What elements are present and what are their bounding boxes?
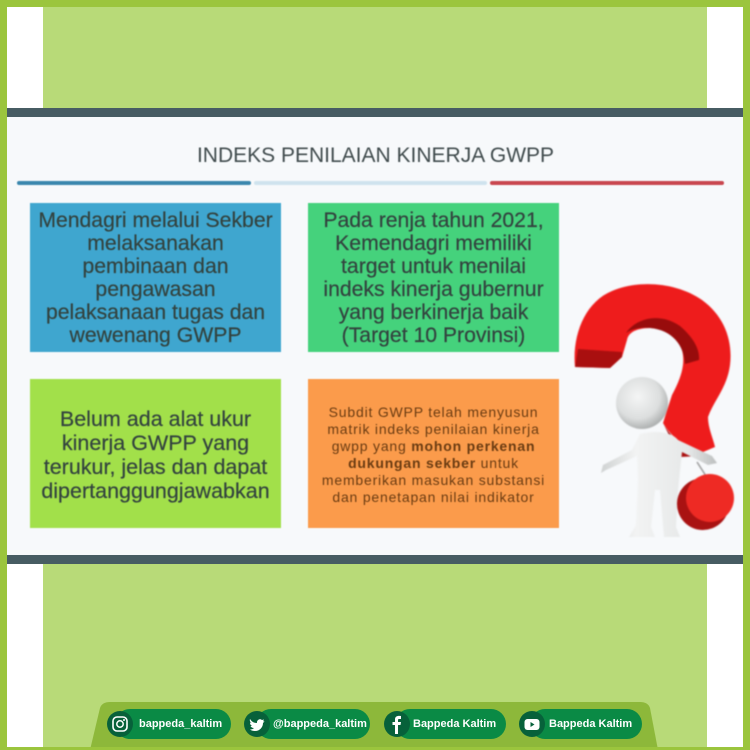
icon: instagram (107, 711, 133, 737)
panel: blue text box: melaksanakan (87, 232, 224, 255)
slide top bar (7, 108, 743, 117)
panel: orange text box: memberikan masukan substansi (322, 472, 545, 488)
panel: orange text box: gwpp yang mohon perkenan (332, 438, 535, 454)
panel: lime text box: terukur, jelas dan dapat (44, 455, 267, 479)
social pill: youtube (530, 709, 642, 739)
panel: lime text box (30, 379, 281, 528)
social pill: facebook: Bappeda Kaltim (413, 718, 496, 730)
outer frame top (0, 0, 750, 7)
panel: blue text box (30, 203, 281, 352)
panel: green text box: Pada renja tahun 2021, (323, 209, 544, 232)
panel: blue text box: Mendagri melalui Sekber (38, 209, 273, 232)
panel: orange text box: dukungan sekber untuk (348, 454, 519, 470)
panel: lime text box: kinerja GWPP yang (62, 431, 249, 455)
panel: lime text box: Belum ada alat ukur (60, 407, 251, 431)
panel: green text box: (Target 10 Provinsi) (342, 324, 525, 347)
social pill: instagram (115, 709, 231, 739)
panel: blue text box: pelaksanaan tugas dan (46, 301, 265, 324)
icon: youtube (519, 711, 545, 737)
icon: red question mark (575, 284, 731, 457)
panel: orange text box (308, 379, 559, 528)
panel: orange text box: Subdit GWPP telah menyusun (329, 404, 538, 420)
panel: green text box: yang berkinerja baik (339, 301, 528, 324)
icon: facebook (384, 711, 410, 737)
panel: lime text box: dipertanggungjawabkan (41, 479, 270, 503)
green background upper (43, 7, 707, 109)
outer frame right (743, 0, 750, 750)
panel: blue text box: pembinaan dan (82, 255, 229, 278)
panel: orange text box: matrik indeks penilaian kinerja (327, 420, 540, 436)
panel: green text box: indeks kinerja gubernur (323, 278, 544, 301)
panel: blue text box: pengawasan (95, 278, 216, 301)
social pill: twitter: @bappeda_kaltim (273, 718, 367, 730)
green background lower (43, 563, 707, 750)
blue title rule (17, 181, 251, 185)
social pill: instagram: bappeda_kaltim (139, 718, 222, 730)
slide bottom bar (7, 555, 743, 564)
title: INDEKS PENILAIAN KINERJA GWPP (197, 144, 554, 167)
icon: red cylinder weight (670, 462, 736, 537)
social pill: youtube: Bappeda Kaltim (549, 718, 632, 730)
social pill: facebook (395, 709, 506, 739)
panel: orange text box: dan penetapan nilai indikator (332, 488, 535, 504)
icon: twitter (244, 711, 270, 737)
panel: green text box (308, 203, 559, 352)
central slide panel (7, 108, 743, 564)
outer frame bottom (0, 747, 750, 750)
icon: white figure (601, 377, 717, 537)
red title rule (490, 181, 724, 185)
outer frame left (0, 0, 7, 750)
panel: green text box: Kemendagri memiliki (335, 232, 532, 255)
light blue title rule (254, 181, 487, 185)
panel: green text box: target untuk menilai (341, 255, 526, 278)
footer tab (90, 702, 658, 747)
social pill: twitter (256, 709, 370, 739)
panel: blue text box: wewenang GWPP (70, 324, 241, 347)
